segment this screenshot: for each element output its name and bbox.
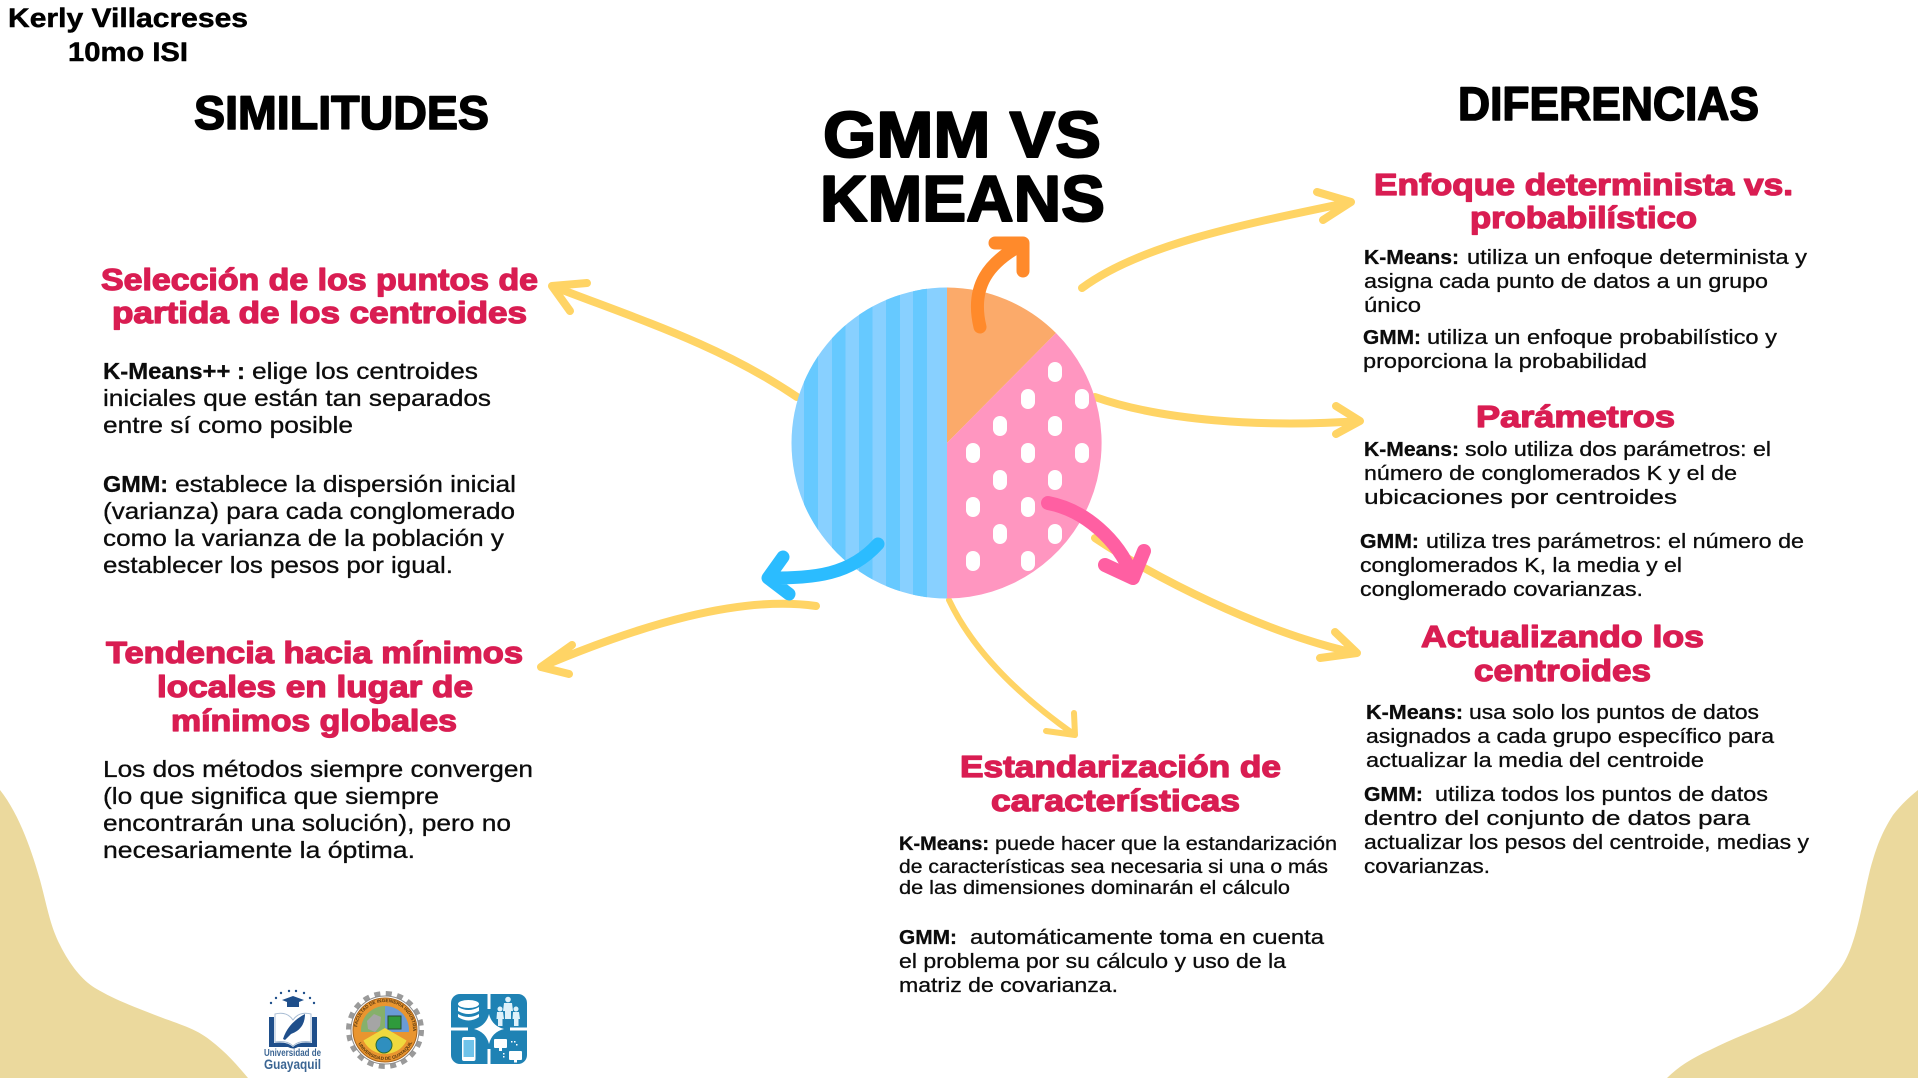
database icon [458,1000,479,1020]
text block: kmeans: de características sea necesaria si una o más [899,857,1328,878]
text block: gmm: utiliza tres parámetros: el número de [1426,530,1804,553]
author name [8,3,248,67]
text block: gmm [1360,530,1804,601]
pie chart [790,285,1102,605]
main title: KMEANS [820,162,1105,235]
decorative blob: bottom left [0,790,248,1078]
text block: kmeans [1364,438,1771,509]
arrow: to parametros [1095,397,1360,434]
text block: kmeans: asigna cada punto de datos a un grupo [1364,270,1768,293]
main title [820,98,1105,235]
arrow: to actualizando centroides [1095,538,1357,658]
main title: GMM VS [823,98,1101,171]
text block: gmm: actualizar los pesos del centroide, medias y [1364,831,1810,854]
text block: kmeans: número de conglomerados K y el de [1364,462,1737,485]
heading: Enfoque determinista vs. [1374,167,1793,202]
panel: actualizando los centroides [1364,619,1810,878]
heading [1421,619,1704,688]
white dots [966,362,1089,571]
arrow: to enfoque determinista [1082,192,1351,288]
arrows: yellow connectors [541,192,1360,735]
text block: kmeans: K-Means: [1366,701,1463,724]
text block: gmm: establecer los pesos por igual. [103,552,453,578]
heading: mínimos globales [171,703,457,738]
text block: gmm: establece la dispersión inicial [175,471,516,497]
text block: kmeans++: K-Means++ : [103,358,245,384]
text block: kmeans: K-Means: [1364,438,1459,461]
people icon [496,997,520,1026]
blue striped half [790,285,947,605]
arrow: orange up [977,243,1023,327]
decorative blob: bottom right [1667,790,1918,1078]
arrow: pink right [1048,503,1144,578]
text block: gmm: GMM: [899,926,957,949]
logo: faculty gear seal [346,991,424,1069]
heading: partida de los centroides [112,295,527,330]
text block: kmeans: solo utiliza dos parámetros: el [1465,438,1771,461]
heading [101,262,538,330]
text block: gmm [1363,326,1778,373]
author name: Kerly Villacreses [8,3,248,33]
text block: gmm: GMM: [1364,783,1423,806]
gaps and center star [451,994,527,1064]
arrow: blue left [768,544,878,594]
text block: kmeans [899,834,1337,899]
text block: kmeans: puede hacer que la estandarización [995,834,1337,855]
text block: gmm: dentro del conjunto de datos para [1364,807,1751,830]
text block: gmm: GMM: [1363,326,1421,349]
heading: probabilístico [1470,200,1697,235]
text block: kmeans: asignados a cada grupo específico para [1366,725,1775,748]
text block: kmeans: usa solo los puntos de datos [1469,701,1759,724]
panel: tendencia hacia minimos locales [103,635,533,863]
heading: características [991,783,1240,818]
logo: faculty gear seal: UNIVERSIDAD DE GUAYAQUIL [358,1042,412,1060]
logo: data icons [451,994,527,1064]
text block: gmm [899,926,1325,997]
text block: kmeans++: entre sí como posible [103,412,353,438]
phone icon [462,1037,476,1061]
heading: diferencias: DIFERENCIAS [1458,77,1759,130]
heading: locales en lugar de [157,669,473,704]
text block: gmm: automáticamente toma en cuenta [970,926,1325,949]
text block [103,756,533,863]
heading [1374,167,1793,235]
text block: kmeans++: iniciales que están tan separados [103,385,491,411]
text block: encontrarán una solución), pero no [103,810,511,836]
heading: centroides [1474,653,1651,688]
text block: kmeans: utiliza un enfoque determinista y [1467,246,1808,269]
text block: kmeans: actualizar la media del centroide [1366,749,1704,772]
text block: necesariamente la óptima. [103,837,415,863]
tile background [451,994,527,1064]
text block: kmeans++ [103,358,491,438]
text block: gmm: (varianza) para cada conglomerado [103,498,515,524]
heading [106,635,523,738]
text block: gmm: utiliza un enfoque probabilístico y [1427,326,1778,349]
panel: enfoque determinista vs probabilistico [1363,167,1808,373]
heading: Actualizando los [1421,619,1704,654]
text block: gmm: matriz de covarianza. [899,974,1118,997]
text block: kmeans++: elige los centroides [252,358,478,384]
text block: kmeans: K-Means: [899,834,989,855]
text block: gmm: GMM: [103,471,168,497]
heading [960,749,1281,818]
text block: kmeans: ubicaciones por centroides [1364,486,1677,509]
panel: parametros [1360,399,1804,601]
text block: kmeans: único [1364,294,1421,317]
text block: gmm: proporciona la probabilidad [1363,350,1647,373]
logo: faculty gear seal: FACULTAD DE INGENIERÍA INDUSTRIAL [354,998,416,1032]
text block: gmm: covarianzas. [1364,855,1490,878]
text block: kmeans: K-Means: [1364,246,1459,269]
arrow: to tendencia minimos [541,604,816,674]
text block: gmm: GMM: [1360,530,1419,553]
orange slice [947,288,1056,443]
arrow: to seleccion de puntos [552,283,797,397]
text block: gmm [103,471,516,578]
pink dotted slice [947,333,1102,598]
arrow: to estandarizacion [949,600,1075,735]
text block: kmeans [1366,701,1775,772]
text block: gmm: el problema por su cálculo y uso de la [899,950,1287,973]
monitors icon [494,1039,522,1062]
logo: universidad de guayaquil [264,990,321,1072]
text block: kmeans [1364,246,1808,317]
text block: (lo que significa que siempre [103,783,439,809]
logo: universidad de guayaquil: Universidad de [264,1048,321,1059]
text block: gmm: conglomerado covarianzas. [1360,578,1643,601]
heading: Parámetros [1476,399,1675,434]
panel: seleccion de los puntos de partida [101,262,538,578]
panel: estandarizacion de caracteristicas [899,749,1337,997]
logo: universidad de guayaquil: Guayaquil [264,1056,321,1072]
text block: gmm [1364,783,1810,878]
heading: Tendencia hacia mínimos [106,635,523,670]
heading: similitudes: SIMILITUDES [194,86,489,139]
heading: Selección de los puntos de [101,262,538,297]
text block: gmm: utiliza todos los puntos de datos [1435,783,1768,806]
author name: 10mo ISI [68,37,188,67]
text block: gmm: como la varianza de la población y [103,525,505,551]
text block: Los dos métodos siempre convergen [103,756,533,782]
heading: Estandarización de [960,749,1281,784]
text block: kmeans: de las dimensiones dominarán el cálculo [899,878,1290,899]
text block: gmm: conglomerados K, la media y el [1360,554,1682,577]
